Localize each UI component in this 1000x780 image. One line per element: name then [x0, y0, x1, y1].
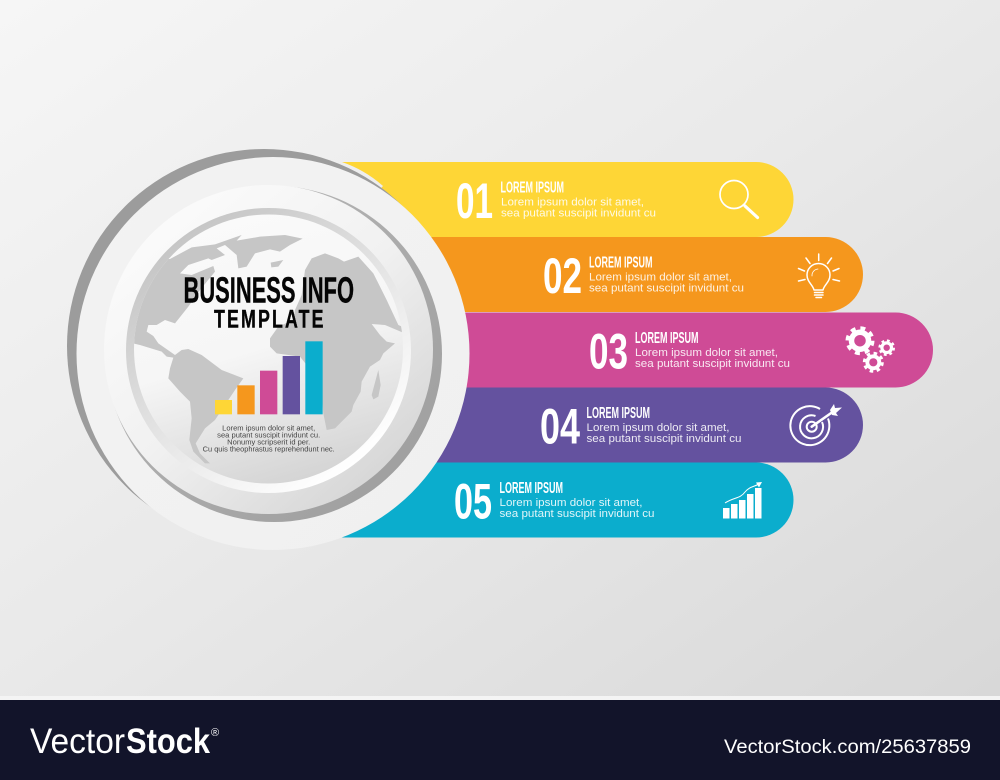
footer image id: VectorStock.com/25637859	[724, 736, 971, 758]
footer bar	[0, 700, 1000, 780]
globe caption: Cu quis theophrastus reprehendunt nec.	[203, 444, 335, 454]
row 3 text	[589, 324, 790, 380]
globe caption: sea putant suscipit invidunt cu.	[217, 430, 320, 440]
row 1 text: LOREM IPSUM	[500, 180, 564, 197]
row 4 text: sea putant suscipit invidunt cu	[586, 433, 742, 445]
globe rim	[126, 208, 411, 493]
row 2 text: LOREM IPSUM	[589, 255, 652, 272]
row 5 text	[454, 474, 654, 530]
footer logo	[30, 722, 219, 761]
title: BUSINESS INFO	[184, 270, 354, 311]
row 5 text: sea putant suscipit invidunt cu	[500, 508, 654, 520]
row 3 text: Lorem ipsum dolor sit amet,	[635, 347, 778, 359]
globe caption: Nonumy scripserit id per.	[227, 438, 310, 446]
row 2 text: 02	[543, 248, 582, 304]
row 1 text: Lorem ipsum dolor sit amet,	[501, 196, 644, 208]
icon: target	[790, 404, 842, 445]
world map	[125, 235, 417, 463]
outer gray crescent	[67, 149, 461, 543]
icon: magnifier	[720, 180, 758, 218]
icon: light bulb	[798, 254, 840, 298]
row 4 text: 04	[540, 398, 580, 454]
row 2 text: Lorem ipsum dolor sit amet,	[589, 272, 732, 284]
title: TEMPLATE	[214, 306, 326, 334]
band 5: cyan	[300, 462, 794, 538]
band 4: purple	[300, 388, 863, 462]
row 4 text: LOREM IPSUM	[586, 405, 650, 422]
row 1 text: sea putant suscipit invidunt cu	[501, 208, 656, 220]
row 1 text	[456, 173, 656, 229]
row 1 text: 01	[456, 173, 493, 229]
row 3 text: 03	[589, 324, 628, 380]
footer logo: Vector	[30, 722, 125, 761]
title	[184, 270, 354, 334]
band 1: yellow	[342, 162, 794, 237]
row 3 text: sea putant suscipit invidunt cu	[635, 358, 790, 370]
icon: gears	[848, 328, 894, 371]
inner gray crescent	[106, 186, 442, 522]
row 4 text: Lorem ipsum dolor sit amet,	[586, 422, 730, 434]
icon: growth chart	[723, 482, 762, 518]
band 3: pink	[300, 312, 933, 388]
row 5 text: 05	[454, 474, 492, 530]
row 5 text: LOREM IPSUM	[500, 480, 563, 497]
bar chart	[215, 341, 323, 414]
globe face	[134, 214, 403, 484]
band 2: orange	[300, 237, 863, 312]
footer logo: Stock	[126, 722, 210, 761]
footer logo: ®	[211, 727, 219, 739]
row 5 text: Lorem ipsum dolor sit amet,	[500, 497, 642, 509]
row 3 text: LOREM IPSUM	[635, 330, 698, 347]
globe caption	[203, 424, 335, 454]
outer white disc	[76, 157, 470, 550]
row 2 text	[543, 248, 744, 304]
row 4 text	[540, 398, 742, 454]
row 2 text: sea putant suscipit invidunt cu	[589, 282, 744, 294]
globe caption: Lorem ipsum dolor sit amet,	[222, 424, 315, 432]
white strip above footer	[0, 696, 1000, 700]
inner light disc	[104, 185, 433, 514]
